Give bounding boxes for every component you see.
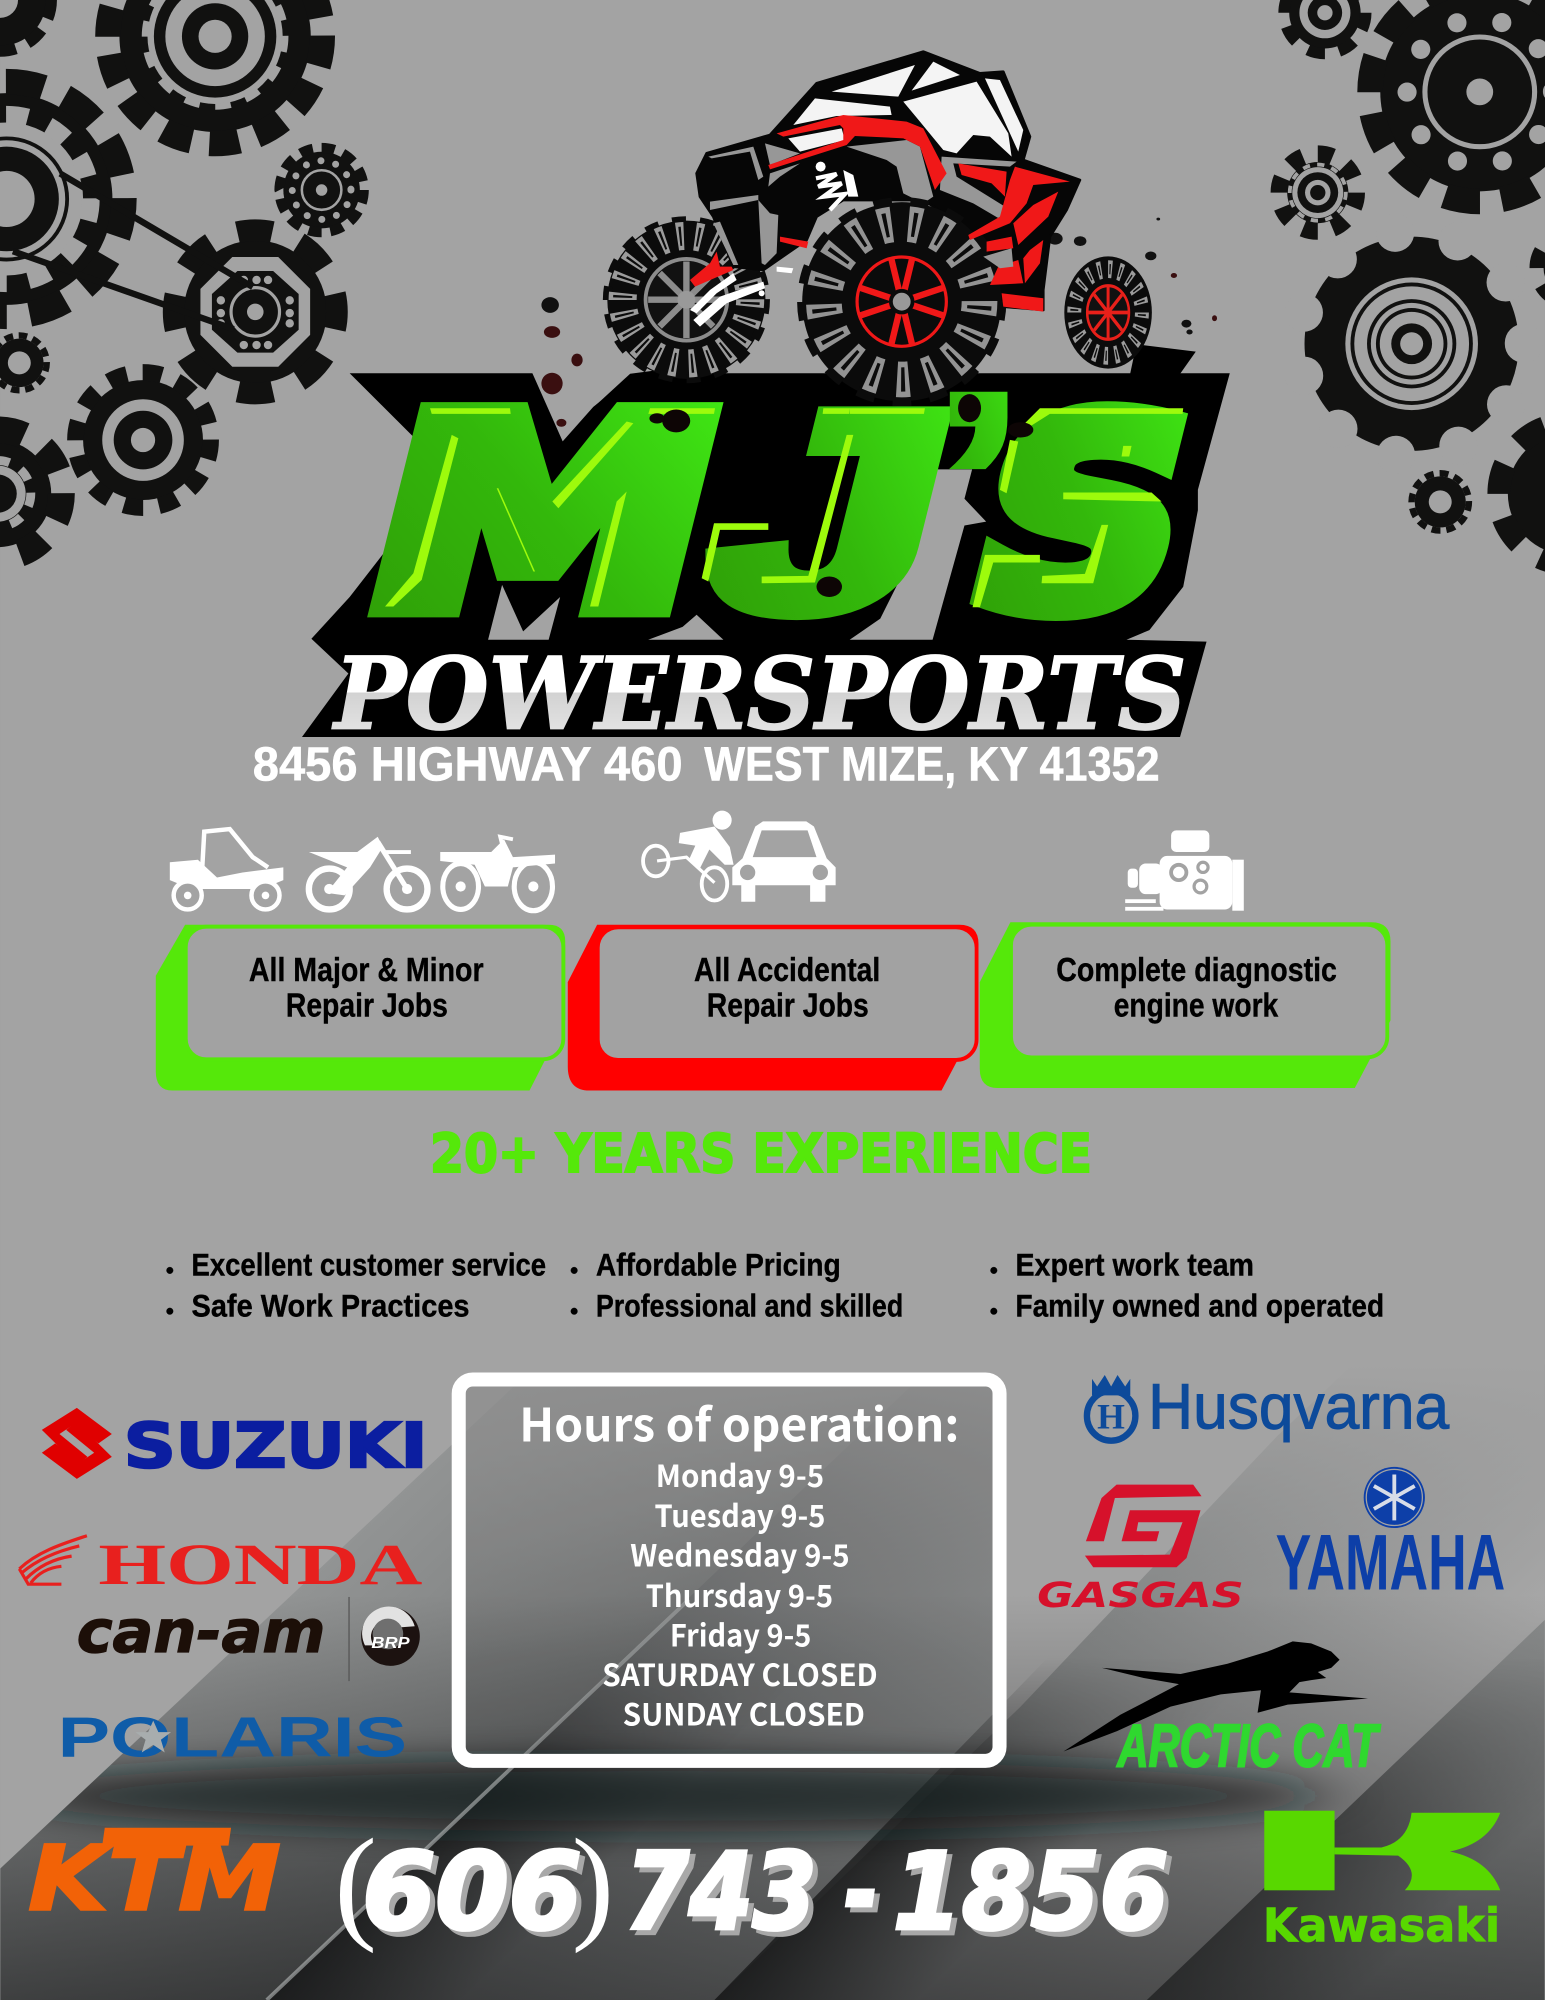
gear: tiny <box>1412 473 1469 531</box>
title: MJ'S: J <box>684 355 981 669</box>
text: accidental repair <box>694 952 880 1025</box>
phone number: 743 <box>630 1836 822 1959</box>
gear: concentric rings <box>1299 232 1524 456</box>
gear: corner <box>0 0 51 51</box>
bullet list: Safe Work Practices <box>192 1287 470 1323</box>
hours heading: Hours of operation: <box>519 1389 959 1455</box>
body and roll cage <box>697 52 1080 310</box>
phone number: ( <box>334 1812 377 1954</box>
bullet list: Expert work team <box>1015 1247 1254 1283</box>
text: major and minor repair: Repair Jobs <box>286 988 448 1025</box>
icon: engine <box>1125 830 1244 911</box>
heading: experience: 20+ YEARS EXPERIENCE <box>430 1122 1092 1185</box>
hours list: Wednesday 9-5 <box>630 1530 850 1575</box>
bullet list <box>167 1247 1384 1323</box>
icon: UTV <box>170 829 283 909</box>
bullet list: Affordable Pricing <box>596 1247 841 1283</box>
panel: accidental repair <box>568 925 978 1091</box>
logo: Can-Am BRP: can-am <box>77 1598 325 1666</box>
gears top right <box>1280 0 1545 564</box>
text: major and minor repair <box>249 952 484 1025</box>
phone number: 606 <box>368 1836 587 1959</box>
panel: hours of operation <box>459 1379 1000 1761</box>
gear: small star <box>1280 154 1356 231</box>
text: accidental repair: All Accidental <box>694 952 880 989</box>
logo: Arctic Cat <box>1063 1641 1381 1780</box>
logo: Honda: HONDA <box>98 1532 422 1597</box>
logo black plate <box>302 372 1230 737</box>
phone number: 1856 <box>898 1836 1174 1959</box>
text: major and minor repair: All Major & Minor <box>249 952 484 989</box>
mud on letters <box>649 394 1033 597</box>
logo: Suzuki: SUZUKI <box>124 1411 427 1482</box>
phone number: 1856 <box>893 1831 1169 1954</box>
logo: Can-Am BRP <box>77 1597 420 1681</box>
red rear frame and exhaust <box>690 163 1070 327</box>
phone number: - <box>850 1836 883 1959</box>
logo: Honda <box>19 1532 422 1597</box>
logo: Husqvarna: Husqvarna <box>1148 1371 1450 1443</box>
gear: octagon <box>174 230 337 393</box>
letter highlights <box>385 408 1183 607</box>
icon: cyclist and car <box>643 811 836 902</box>
title: MJ'S <box>341 333 1222 669</box>
title: MJ'S: S <box>944 364 1222 667</box>
address: 8456 HIGHWAY 460 <box>253 738 683 792</box>
vehicle: UTV <box>607 52 1152 401</box>
hours list: SATURDAY CLOSED <box>602 1650 878 1695</box>
rear left wheel <box>607 221 765 379</box>
mud splatter <box>541 218 1217 427</box>
logo: Kawasaki: Kawasaki <box>1263 1898 1500 1952</box>
phone number <box>334 1812 1174 1959</box>
hours list: SUNDAY CLOSED <box>623 1690 865 1735</box>
gear: top small <box>1284 0 1366 54</box>
panel: diagnostic engine work <box>980 922 1390 1088</box>
logo: Arctic Cat: ARCTIC CAT <box>1116 1713 1381 1780</box>
hours list: Friday 9-5 <box>670 1611 811 1656</box>
icon: dirt bike <box>309 837 427 909</box>
bullet list: Excellent customer service <box>192 1247 546 1283</box>
text: diagnostic engine work <box>1056 952 1337 1025</box>
gear: left large with belt <box>0 82 124 316</box>
front wheel <box>802 202 1001 401</box>
address <box>253 738 1160 792</box>
car <box>732 821 836 902</box>
bullet list: Professional and skilled <box>596 1287 903 1323</box>
hours list <box>602 1451 878 1735</box>
icon: ATV <box>440 837 555 911</box>
phone number: 743 <box>625 1831 817 1954</box>
panel: major and minor repair <box>156 925 565 1091</box>
bullet list: Family owned and operated <box>1015 1287 1384 1323</box>
cyclist <box>643 811 734 901</box>
phone number: - <box>845 1831 878 1954</box>
rear right wheel <box>1064 256 1152 369</box>
title: MJ'S: M <box>341 364 748 667</box>
gear: lower medium <box>75 372 211 508</box>
gear: small dotted <box>280 148 364 232</box>
text: diagnostic engine work: engine work <box>1114 988 1279 1025</box>
logo: Husqvarna: H <box>1097 1397 1125 1437</box>
logo: Suzuki <box>42 1408 427 1482</box>
text: accidental repair: Repair Jobs <box>707 988 869 1025</box>
phone number: ) <box>572 1812 614 1954</box>
address: WEST MIZE, KY 41352 <box>704 738 1160 792</box>
phone number: 606 <box>362 1831 582 1954</box>
background <box>0 1387 1545 2000</box>
gear: right sliver <box>1537 233 1545 302</box>
logo: Yamaha <box>1276 1467 1505 1606</box>
hours list: Monday 9-5 <box>656 1451 824 1496</box>
gear belts <box>13 173 253 329</box>
gears top left <box>0 0 364 557</box>
logo: GasGas: GASGAS <box>1037 1576 1244 1616</box>
icons: vehicles <box>170 829 555 911</box>
title: POWERSPORTS: POWERSPORTS <box>331 636 1186 752</box>
gear: lower left edge <box>0 430 61 557</box>
gear: right edge <box>1499 423 1545 564</box>
logo: Can-Am BRP: BRP <box>371 1635 411 1652</box>
logo: KTM: KTM <box>28 1827 281 1931</box>
logo: Kawasaki <box>1263 1811 1500 1952</box>
title: MJ'S: ’ <box>921 333 1035 639</box>
hours list: Tuesday 9-5 <box>655 1491 825 1536</box>
gear: top large <box>108 0 322 143</box>
logo: GasGas <box>1037 1485 1244 1616</box>
logo: Polaris: POLARIS <box>58 1705 407 1768</box>
text: diagnostic engine work: Complete diagnostic <box>1056 952 1337 989</box>
hours list: Thursday 9-5 <box>646 1571 833 1616</box>
gear: tiny left <box>0 335 47 390</box>
gear: large dotted <box>1370 0 1545 202</box>
